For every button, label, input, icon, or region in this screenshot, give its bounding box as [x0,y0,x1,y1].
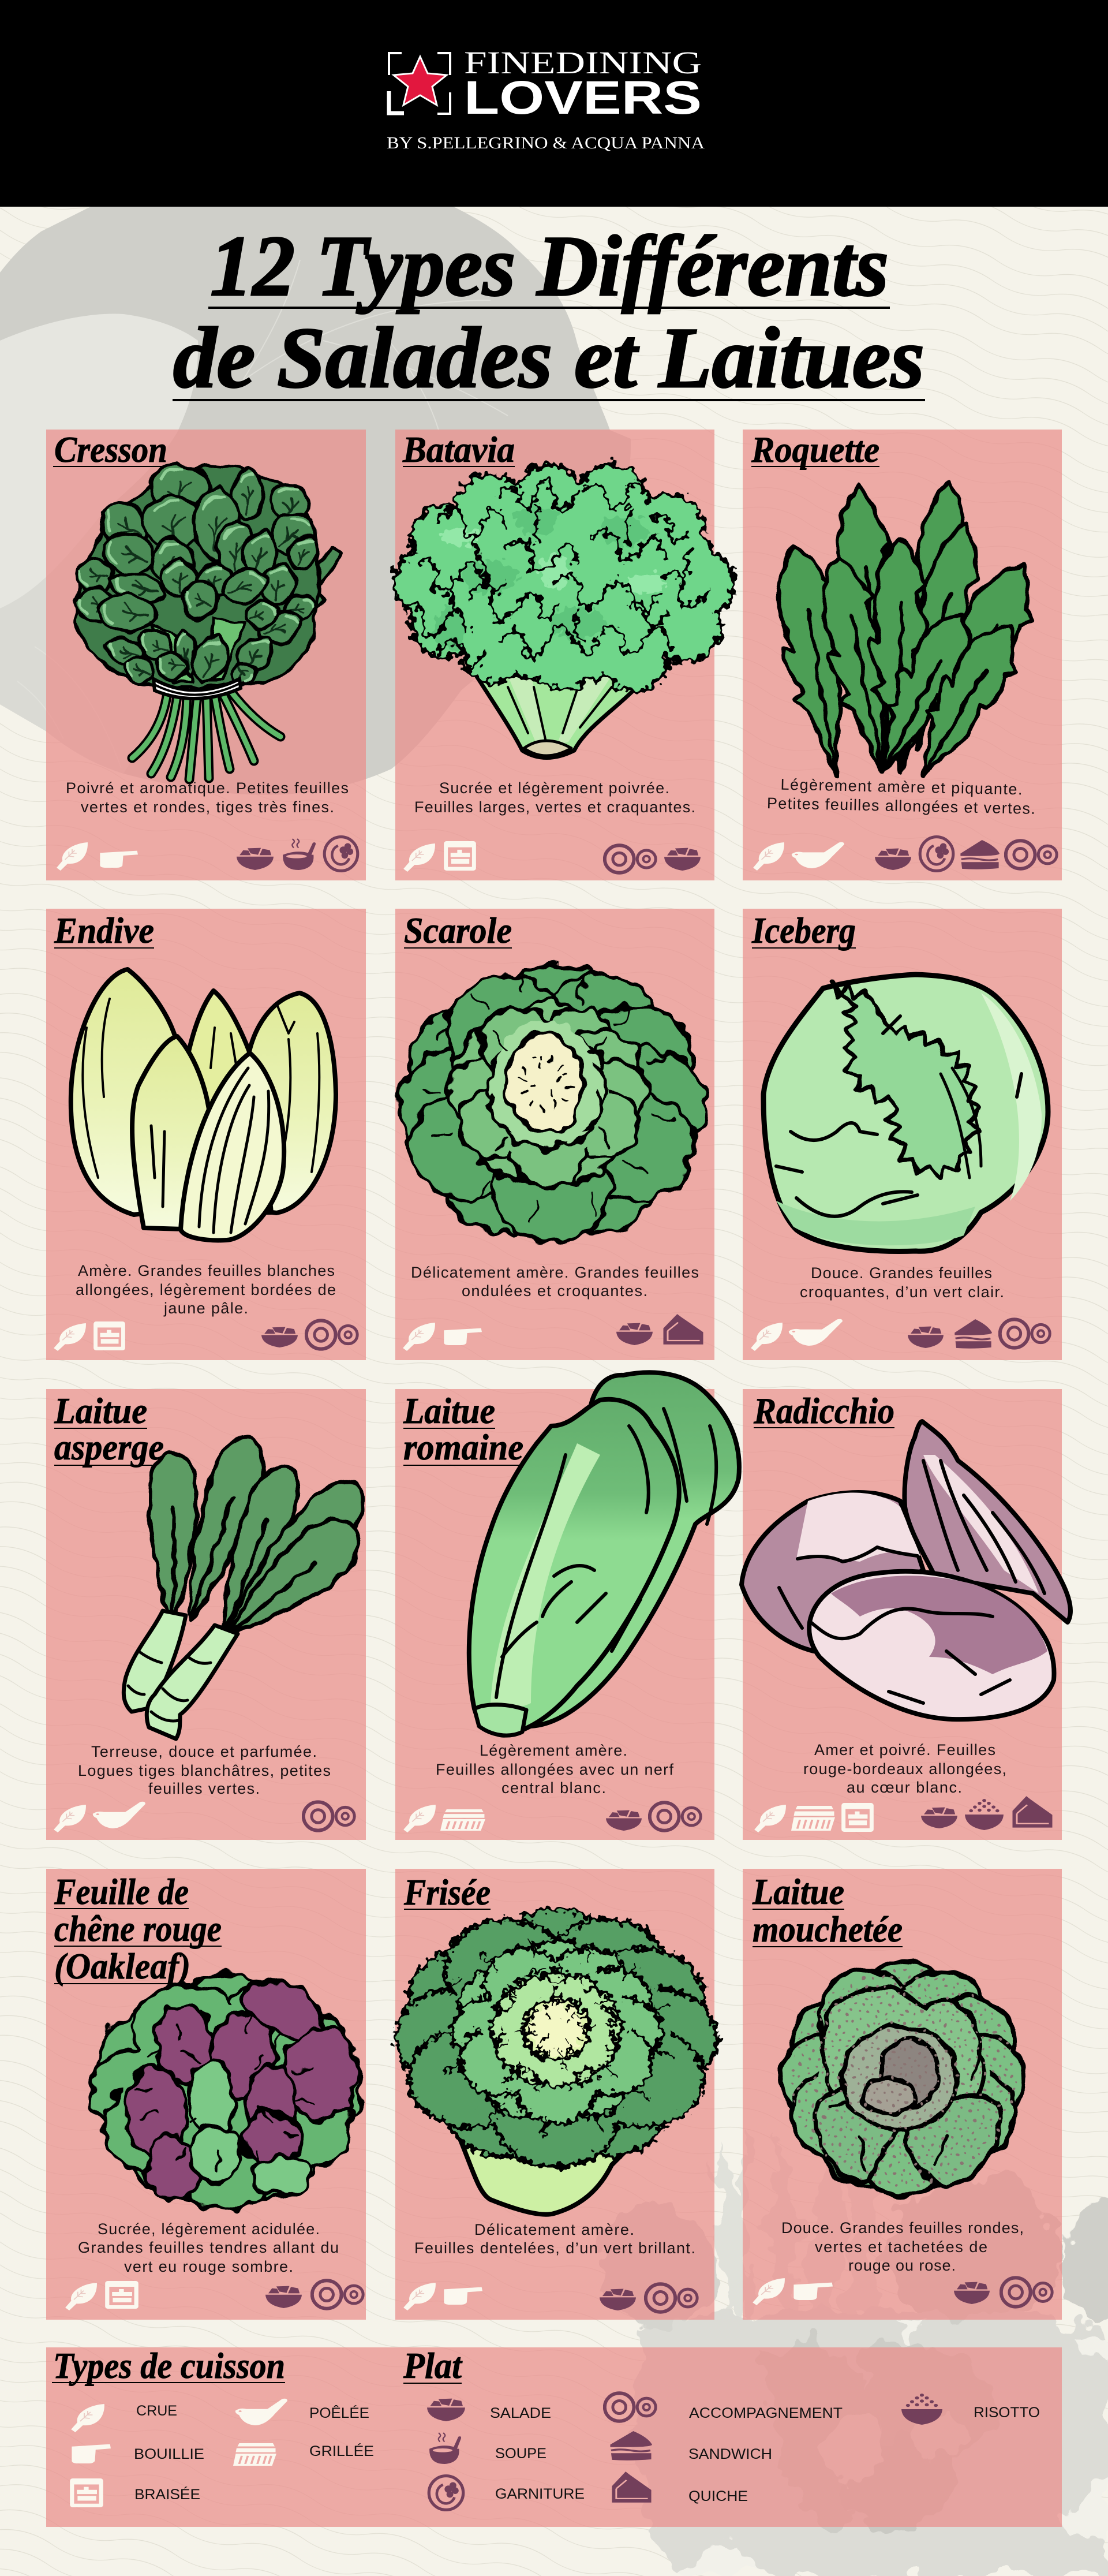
illustration: scarole head [398,964,706,1244]
description [767,775,1036,817]
panel: Roquette: Roquette [751,429,879,470]
description: Délicatement amère. Grandes feuilles [411,1264,699,1281]
heading: plat: Plat [403,2345,463,2386]
illustration: asparagus lettuce [123,1429,377,1739]
panel: Laitue romaine: romaine [403,1427,523,1468]
illustration: speckled lettuce [781,1962,1025,2195]
description: central blanc. [501,1779,606,1797]
panel: Feuille de chêne rouge: chêne rouge [54,1908,222,1949]
icons: cooking and dishes [403,2283,697,2312]
legend: types de cuisson: POÊLÉE [309,2405,369,2421]
icons: cooking and dishes [54,1802,354,1832]
description: Douce. Grandes feuilles rondes, [781,2219,1024,2237]
legend: types de cuisson: BRAISÉE [134,2486,200,2503]
panel: Iceberg: Iceberg [751,910,856,951]
main title [173,218,925,406]
legend: plats: QUICHE [688,2488,748,2504]
legend: types de cuisson: BOUILLIE [134,2446,204,2462]
panel: Frisée: Frisée [403,1872,491,1913]
description: au cœur blanc. [847,1779,962,1796]
panel: Feuille de chêne rouge [46,1869,366,2320]
panel: Laitue mouchetée [743,1869,1062,2320]
description [414,779,695,816]
description: vert eu rouge sombre. [124,2258,293,2275]
icons: cooking and dishes [65,2280,363,2310]
description: vertes et rondes, tiges très fines. [81,798,334,816]
icons: cooking and dishes [57,837,358,871]
panel: Laitue asperge: asperge [54,1427,164,1468]
heading: types de cuisson: Types de cuisson [53,2345,285,2386]
description [76,1262,336,1317]
description: vertes et tachetées de [815,2238,987,2256]
illustration: romaine lettuce [469,1372,739,1735]
panel: Laitue mouchetée: Laitue [752,1871,844,1912]
header band [0,0,1108,207]
panel: Iceberg [743,909,1062,1360]
panel: Radicchio: Radicchio [753,1390,894,1431]
description: Amer et poivré. Feuilles [814,1741,995,1759]
illustration: endives [71,969,336,1240]
illustration: cresson bunch [74,460,340,779]
legend: plats [427,2393,1040,2510]
description: Légèrement amère et piquante. [780,776,1023,798]
ghost photo: leafy plant bottom right [597,2123,1108,2576]
description [78,1743,331,1797]
description: Sucrée et légèrement poivrée. [439,779,669,797]
description: feuilles vertes. [148,1780,260,1797]
logo: camera brackets and star [389,53,450,114]
icons: cooking and dishes [753,837,1057,871]
legend: plats: ACCOMPAGNEMENT [689,2405,843,2421]
panel: Laitue mouchetée: mouchetée [753,1909,903,1950]
ghost photo: cabbage leaf top left [0,207,631,795]
legend: types de cuisson [70,2399,374,2507]
illustration: frisee head [395,1909,717,2215]
description: Petites feuilles allongées et vertes. [767,794,1035,817]
illustration: oakleaf lettuce [91,1969,362,2208]
description [781,2219,1024,2274]
panel: Batavia [395,429,732,880]
panel: Scarole [395,909,714,1360]
description [800,1264,1004,1301]
main title: de Salades et Laitues [173,310,924,406]
icons: cooking and dishes [54,1320,357,1351]
logo wordmark: LOVERS: LOVERS [464,72,702,124]
main title: 12 Types Différents [210,218,889,314]
legend: plats: SANDWICH [688,2446,772,2462]
description: Feuilles larges, vertes et craquantes. [414,798,695,816]
legend: plats: GARNITURE [495,2486,585,2502]
description: Amère. Grandes feuilles blanches [78,1262,335,1279]
panel: Scarole: Scarole [404,910,512,951]
panel: Batavia: Batavia [402,429,515,470]
icons: cooking and dishes [403,841,701,873]
description [414,2221,695,2257]
description: Douce. Grandes feuilles [811,1264,992,1282]
illustration: iceberg head [763,975,1048,1252]
description: rouge ou rose. [848,2257,956,2274]
description [803,1741,1006,1796]
icons: cooking and dishes [753,2278,1052,2307]
description: Grandes feuilles tendres allant du [78,2239,339,2256]
panel: Roquette [743,429,1062,880]
panel: Laitue romaine: Laitue [403,1390,495,1431]
panel: Feuille de chêne rouge: Feuille de [54,1871,189,1912]
description: Poivré et aromatique. Petites feuilles [66,779,349,797]
panel: Cresson [46,429,366,880]
logo wordmark: FINEDINING: FINEDINING [464,45,702,80]
icons: cooking and dishes [403,1314,703,1351]
panel: Endive [46,909,366,1360]
description [66,779,349,816]
legend: plats: SALADE [490,2405,551,2421]
description: Délicatement amère. [474,2221,634,2238]
description [411,1264,699,1300]
description: jaune pâle. [163,1300,248,1317]
description: Sucrée, légèrement acidulée. [98,2220,320,2238]
legend: types de cuisson: CRUE [136,2403,177,2419]
panel: Endive: Endive [54,910,154,951]
panel: Frisée [395,1869,717,2320]
description: Terreuse, douce et parfumée. [91,1743,317,1760]
description: ondulées et croquantes. [462,1282,647,1300]
logo tagline: BY S.PELLEGRINO & ACQUA PANNA [387,134,705,152]
icons: cooking and dishes [403,1802,701,1832]
description [78,2220,339,2275]
description: Logues tiges blanchâtres, petites [78,1762,331,1779]
panel: Laitue asperge [46,1389,377,1840]
panel: legend [46,2345,1062,2527]
legend: plats: RISOTTO [974,2405,1040,2421]
description: Feuilles allongées avec un nerf [436,1761,673,1778]
panel: Laitue romaine [395,1372,739,1840]
illustration: radicchio heads [742,1421,1070,1719]
description: Légèrement amère. [480,1742,627,1759]
description: croquantes, d’un vert clair. [800,1283,1004,1301]
description: Feuilles dentelées, d’un vert brillant. [414,2239,695,2257]
legend: plats: SOUPE [495,2446,546,2462]
description [436,1742,673,1797]
panel: Cresson: Cresson [54,429,167,470]
panel: Laitue asperge: Laitue [54,1390,147,1431]
icons: cooking and dishes [751,1319,1050,1351]
illustration: batavia lettuce [396,466,732,757]
panel: Feuille de chêne rouge: (Oakleaf) [54,1946,190,1987]
description: rouge-bordeaux allongées, [803,1760,1006,1778]
panel: Radicchio [742,1389,1070,1840]
illustration: roquette leaves [765,478,1051,792]
description: allongées, légèrement bordées de [76,1281,336,1298]
icons: cooking and dishes [754,1796,1053,1832]
legend: types de cuisson: GRILLÉE [309,2443,374,2459]
